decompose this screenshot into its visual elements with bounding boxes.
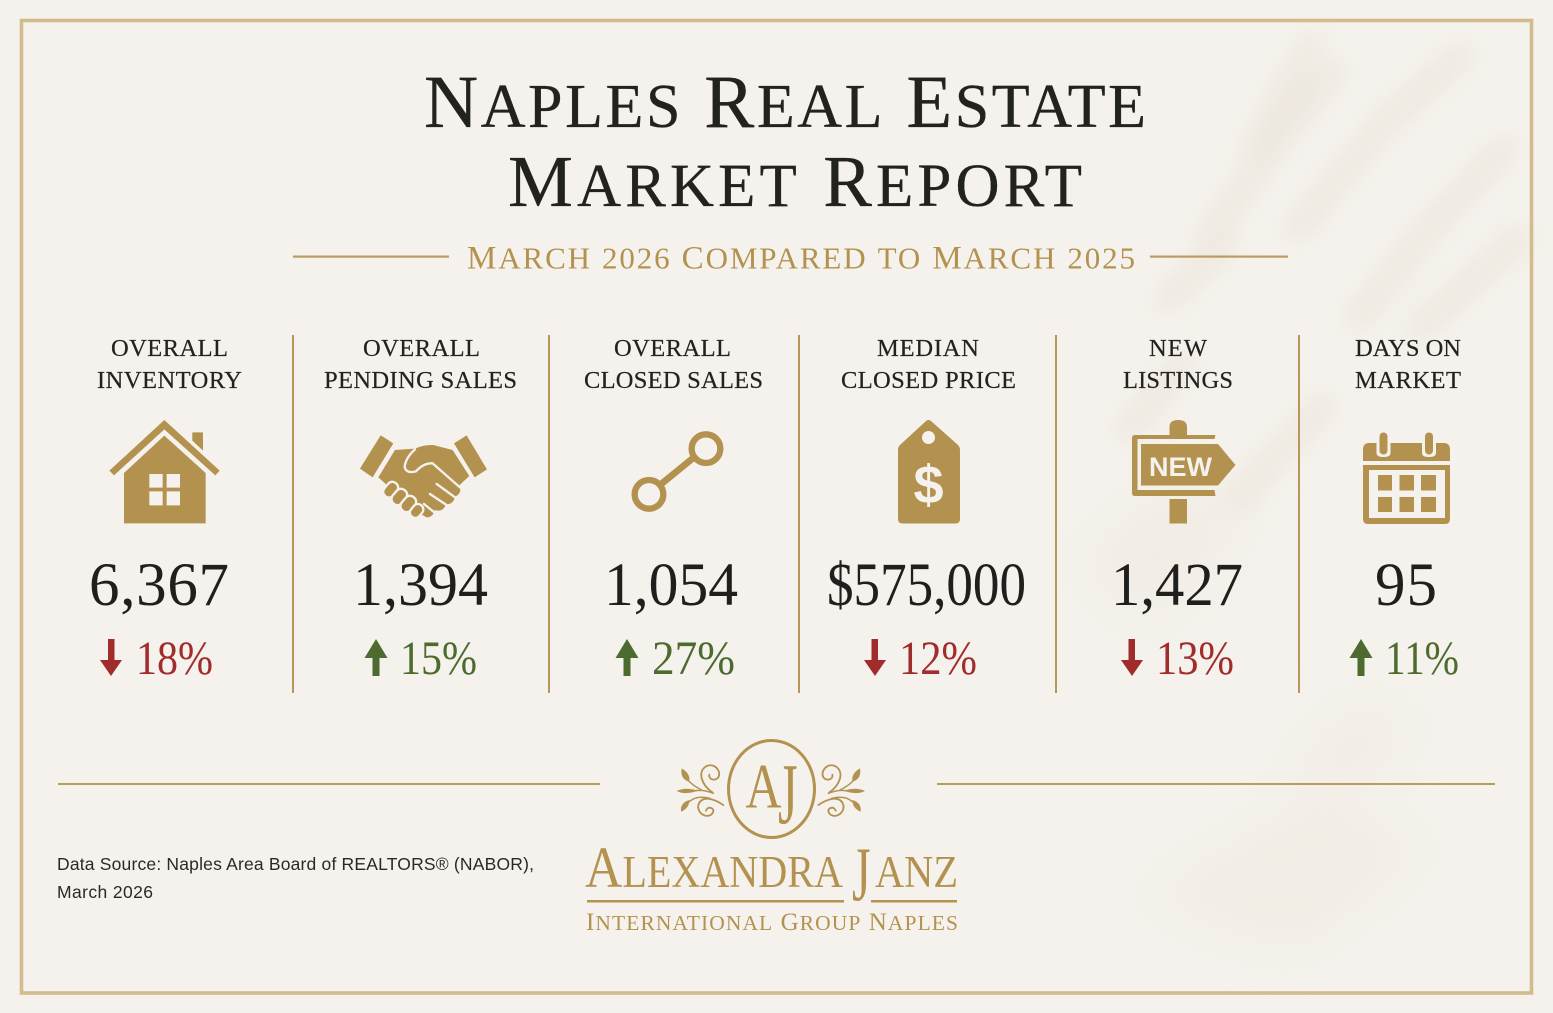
change: up 15%: 15% (400, 632, 477, 685)
label: NEW (1149, 335, 1208, 362)
data source note: March 2026 (57, 882, 153, 902)
label: INVENTORY (97, 367, 242, 394)
icon: new sign: NEW (1149, 452, 1213, 482)
title (424, 61, 1146, 222)
icon: house (109, 420, 220, 523)
label: MARKET (1355, 367, 1461, 394)
wordmark: J (852, 831, 871, 917)
column dividers (292, 335, 1300, 693)
flourish: right (818, 765, 865, 816)
icon: price tag: $ (913, 455, 944, 515)
data source note: Data Source: Naples Area Board of REALTORS® (NABOR), (57, 854, 534, 874)
title: MARKET REPORT (508, 141, 1082, 222)
change: up 11% (1350, 632, 1459, 685)
monogram: J (778, 747, 798, 843)
icon: calendar (1363, 432, 1450, 524)
label (324, 335, 517, 394)
flourish: left (677, 765, 723, 816)
label: LISTINGS (1123, 367, 1233, 394)
panel: overall closed sales (584, 335, 763, 685)
wordmark: INTERNATIONAL GROUP NAPLES (586, 909, 958, 936)
value: 1,427 (1111, 552, 1243, 619)
change: up 11%: 11% (1385, 632, 1459, 685)
label (841, 335, 1016, 394)
change: up 27% (616, 632, 735, 685)
label: DAYS ON (1355, 335, 1461, 362)
label (1355, 335, 1461, 394)
icon: handshake (360, 435, 487, 520)
change: down 13%: 13% (1156, 632, 1234, 685)
panel: overall inventory (89, 335, 242, 685)
icon: price tag (898, 420, 960, 524)
change: down 12% (864, 632, 977, 685)
footer rules (58, 783, 1495, 785)
label: PENDING SALES (324, 367, 517, 394)
wordmark: ALEXANDRA (585, 835, 843, 900)
data source note (57, 854, 534, 902)
value: 1,394 (353, 552, 488, 619)
panel: new listings (1111, 335, 1243, 685)
label: MEDIAN (877, 335, 979, 362)
label: OVERALL (614, 335, 731, 362)
title: NAPLES REAL ESTATE (424, 61, 1146, 144)
monogram: A (746, 752, 782, 822)
label: OVERALL (111, 335, 228, 362)
wordmark: ANZ (875, 847, 958, 897)
label (1123, 335, 1233, 394)
panel: median closed price (827, 335, 1026, 685)
change: down 18%: 18% (136, 632, 213, 685)
change: up 27%: 27% (652, 632, 735, 685)
wordmark (585, 831, 958, 936)
logo: Alexandra Janz (585, 740, 958, 936)
monogram (728, 740, 814, 843)
change: up 15% (364, 632, 477, 685)
icon: connected circles (635, 434, 720, 509)
label: CLOSED SALES (584, 367, 763, 394)
panel: days on market (1350, 335, 1461, 685)
panel: overall pending sales (324, 335, 517, 685)
value: 95 (1375, 552, 1437, 619)
value: 6,367 (89, 552, 229, 619)
label: CLOSED PRICE (841, 367, 1016, 394)
label (584, 335, 763, 394)
subtitle with rules: MARCH 2026 COMPARED TO MARCH 2025 (467, 240, 1135, 276)
icon: new sign (1132, 420, 1236, 524)
change: down 18% (100, 632, 213, 685)
change: down 13% (1121, 632, 1234, 685)
change: down 12%: 12% (899, 632, 977, 685)
label (97, 335, 242, 394)
value: $575,000 (827, 552, 1026, 619)
value: 1,054 (604, 552, 738, 619)
label: OVERALL (363, 335, 480, 362)
